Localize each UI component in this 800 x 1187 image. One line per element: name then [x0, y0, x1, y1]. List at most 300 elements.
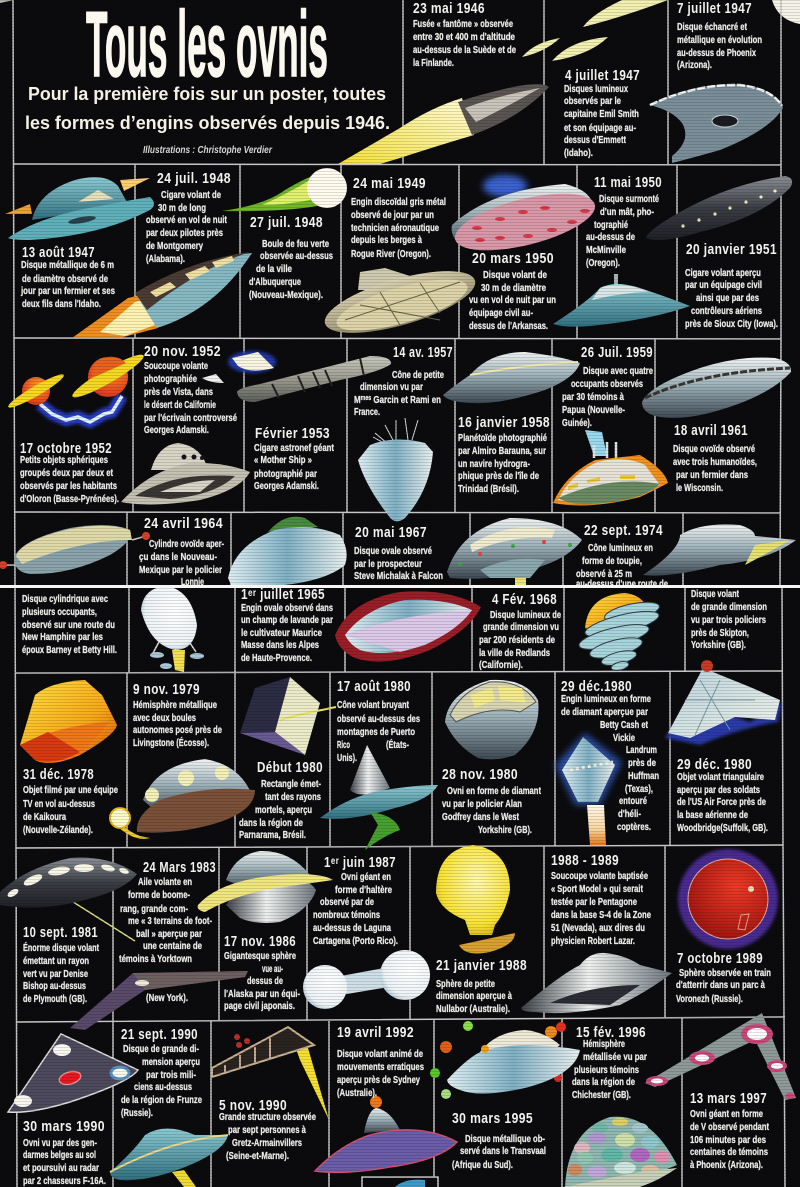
entry: 24 mai 1949: 24 mai 1949 [353, 176, 426, 192]
entry: 21 sept. 1990: Disque de grande di- [123, 1043, 199, 1055]
entry: 19 avril 1992: (Australie). [337, 1087, 377, 1099]
entry: 7 juillet 1947: métallique en évolution [677, 34, 762, 46]
entry: 13 mars 1997: 106 minutes par des [690, 1134, 766, 1146]
icon: disque échancré 1947 [649, 84, 783, 163]
entry: 1er juillet 1965: 1 [241, 587, 250, 603]
icon: disque 1992 [315, 1096, 457, 1172]
entry: 14 av. 1957: dimension vu par [360, 381, 423, 393]
entry: Février 1953 [254, 426, 334, 492]
entry: 18 avril 1961: par un fermier dans [676, 469, 748, 481]
entry: 29 déc.1980 diamant: Landrum [626, 744, 657, 756]
entry: 28 nov. 1980: Ovni en forme de diamant [447, 785, 541, 797]
icon: ovale 1967 [228, 517, 347, 587]
entry: 30 mars 1995: (Afrique du Sud). [452, 1159, 513, 1171]
entry: 26 Juil. 1959: Papua (Nouvelle- [562, 404, 625, 416]
entry: 20 mars 1950: 30 m de diamètre [481, 282, 546, 294]
entry: 20 janvier 1951: par un équipage civil [685, 279, 762, 291]
icon: objets sphériques 1952 [6, 349, 147, 422]
icon: triangle belge 1990 [8, 1034, 138, 1112]
entry: 24 avril 1964 [139, 516, 224, 588]
entry: 26 Juil. 1959: Disque avec quatre [583, 365, 653, 377]
entry: 29 déc.1980 diamant: 29 déc.1980 [561, 679, 632, 695]
entry: 24 juil. 1948 [146, 171, 231, 265]
icon: engin discoïdal 1949 [319, 258, 481, 346]
entry: 9 nov. 1979: Hémisphère métallique [133, 699, 217, 711]
entry: 1er juillet 1965: Engin ovale observé dans [241, 602, 333, 614]
entry: 17 nov. 1986: page civil japonais. [224, 1000, 295, 1012]
entry: 9 nov. 1979: 9 nov. 1979 [133, 682, 200, 698]
entry: 30 mars 1990 [23, 1119, 106, 1187]
entry: 21 sept. 1990: 21 sept. 1990 [121, 1027, 198, 1043]
entry: 7 octobre 1989: d'atterrir dans un parc à [676, 979, 765, 991]
entry: 24 avril 1964: 24 avril 1964 [144, 516, 223, 532]
entry: 27 juil. 1948: de la ville [256, 263, 292, 275]
entry: 1988 - 1989 [551, 853, 651, 947]
entry: 18 avril 1961: Disque ovoïde observé [673, 443, 755, 455]
entry: Début 1980: Rectangle émet- [261, 778, 321, 790]
entry: 13 mars 1997: Ovni géant en forme [690, 1108, 763, 1120]
entry: 20 nov. 1952: par l'écrivain controversé [144, 412, 237, 424]
entry: 24 Mars 1983: (New York). [146, 992, 188, 1004]
entry: 15 fév. 1996: Hémisphère [583, 1038, 625, 1050]
entry: 31 déc. 1978: TV en vol au-dessus [23, 798, 95, 810]
entry: 24 juil. 1948: observé en vol de nuit [146, 214, 227, 226]
entry: 29 déc. 1980 triangle: de l'US Air Force près de [677, 796, 766, 808]
entry: 1er juin 1987: nombreux témoins [313, 909, 380, 921]
entry: 29 déc. 1980 triangle: la base aérienne de [677, 809, 748, 821]
entry: 24 Mars 1983: témoins à Yorktown [119, 953, 192, 965]
entry: 15 fév. 1996 [572, 1025, 647, 1101]
entry: 17 août 1980 [337, 679, 420, 764]
icon: astronef Mother Ship [237, 356, 391, 402]
entry: 10 sept. 1981: Énorme disque volant [23, 941, 99, 954]
entry: 24 juil. 1948: Cigare volant de [161, 189, 221, 201]
entry: 5 nov. 1990: par sept personnes à [228, 1124, 306, 1136]
entry: 18 avril 1961: 18 avril 1961 [674, 423, 748, 439]
entry: 15 fév. 1996: Chichester (GB). [572, 1089, 631, 1101]
entry: 10 sept. 1981: vert vu par Denise [23, 968, 88, 980]
entry: 20 mars 1950: Disque volant de [483, 269, 547, 281]
entry: 17 nov. 1986: 17 nov. 1986 [224, 934, 296, 950]
entry: 10 sept. 1981: Bishop au-dessus [23, 980, 86, 992]
entry: 24 Mars 1983: une centaine de [143, 940, 202, 952]
icon: sphère ampoule 1988 [436, 845, 515, 953]
entry: 29 déc. 1980 triangle: 29 déc. 1980 [677, 757, 752, 773]
icon: Sport Model 1988 [521, 953, 672, 1013]
entry: 20 janvier 1951 [685, 242, 778, 330]
entry: 27 juil. 1948: observée au-dessus [260, 250, 333, 262]
entry: 20 nov. 1952: photographiée [144, 373, 197, 385]
entry: Février 1953: Cigare astronef géant [254, 442, 334, 454]
icon: disque de Frunze 1990 [110, 1128, 228, 1187]
text: disque de Skipton: Yorkshire (GB). [691, 639, 746, 651]
entry: 1988 - 1989: 51 (Nevada), aux dires du [551, 922, 645, 934]
entry: 4 juillet 1947: Disques lumineux [564, 83, 628, 95]
icon: hémisphère métallique 1979 [110, 759, 255, 839]
entry: 24 juil. 1948: de Montgomery [146, 240, 203, 252]
entry: Début 1980: Début 1980 [257, 760, 323, 776]
entry: 1988 - 1989: dans la base S-4 de la Zone [551, 909, 651, 921]
entry: 16 janvier 1958 [458, 415, 550, 495]
icon: disque hublots 1967 [447, 518, 582, 586]
entry: 28 nov. 1980: vu par le policier Alan [442, 798, 522, 810]
text: disque cylindrique Barney et Betty Hill: époux Barney et Betty Hill. [22, 644, 117, 656]
entry: 21 janvier 1988: Nullabor (Australie). [436, 1003, 510, 1015]
entry: 20 janvier 1951: contrôleurs aériens [691, 305, 762, 317]
icon: soucoupe Adamski [121, 443, 250, 505]
entry: 7 juillet 1947: Disque échancré et [677, 21, 747, 33]
entry: 28 nov. 1980: 28 nov. 1980 [442, 767, 518, 783]
entry: 17 nov. 1986: Gigantesque sphère [224, 950, 296, 962]
entry: 31 déc. 1978: de Kaikoura [23, 811, 66, 823]
entry: 20 mars 1950: 20 mars 1950 [472, 251, 554, 267]
entry: 20 nov. 1952 [144, 344, 237, 436]
entry: 29 déc. 1980 triangle [677, 757, 768, 834]
entry: 17 nov. 1986 [224, 934, 300, 1012]
entry: 29 déc. 1980 triangle: aperçu par des soldats [677, 784, 760, 796]
entry: 22 sept. 1974: au-dessus d'une route de [576, 578, 668, 590]
icon: disque en feu 1959 [553, 430, 668, 505]
entry: Début 1980: mortels, aperçu [255, 804, 312, 816]
entry: 7 octobre 1989: Voronezh (Russie). [676, 993, 743, 1005]
entry: 4 Fév. 1968 [479, 592, 561, 671]
entry: 1er juin 1987: forme d'haltère [335, 884, 392, 896]
entry: Février 1953: Février 1953 [255, 426, 330, 442]
text: disque cylindrique Barney et Betty Hill: observé sur une route du [22, 619, 115, 631]
subtitle: Pour la première fois sur un poster, toutes [28, 84, 386, 104]
icon: ovni en V 1997 [645, 1013, 796, 1100]
icon: sphère à anneau 1986 [198, 851, 333, 923]
entry: 19 avril 1992 [337, 1025, 424, 1099]
icon: soucoupe 1974 [643, 524, 796, 576]
entry: 26 Juil. 1959 [562, 345, 653, 429]
entry: 1er juillet 1965: Masse dans les Alpes [241, 639, 319, 651]
entry: 4 juillet 1947: 4 juillet 1947 [565, 68, 640, 84]
entry: 23 mai 1946 [413, 1, 516, 69]
entry: 29 déc. 1980 triangle: Objet volant triangulaire [677, 771, 764, 783]
entry: 27 juil. 1948: d'Albuquerque [249, 276, 301, 288]
entry: 30 mars 1995: servé dans le Transvaal [460, 1145, 546, 1157]
entry: 28 nov. 1980: Godfrey dans le West [442, 811, 519, 823]
entry: 20 mai 1967: par le prospecteur [354, 558, 422, 570]
entry: 20 janvier 1951: ainsi que par des [696, 292, 759, 304]
icon: dôme multicolore 1996 [563, 1117, 677, 1187]
entry: 15 fév. 1996: métallisée vu par [583, 1051, 647, 1063]
entry: 1er juillet 1965: le cultivateur Maurice [241, 627, 322, 639]
icon: disques lumineux 1947 [522, 0, 668, 61]
entry: 4 juillet 1947: capitaine Emil Smith [564, 108, 639, 120]
entry: 22 sept. 1974: forme de toupie, [582, 555, 642, 567]
entry: 17 octobre 1952: Petits objets sphériques [20, 454, 108, 466]
entry: 7 octobre 1989: 7 octobre 1989 [677, 951, 763, 967]
entry: 19 avril 1992: aperçu près de Sydney [337, 1074, 420, 1086]
entry: 14 av. 1957: M [354, 394, 363, 406]
entry: 23 mai 1946: Fusée « fantôme » observée [413, 18, 513, 30]
entry: 29 déc.1980 diamant: coptères. [617, 821, 651, 833]
entry: 30 mars 1995: 30 mars 1995 [452, 1111, 533, 1127]
entry: 16 janvier 1958: phique près de l'île de [458, 470, 539, 482]
entry: 21 sept. 1990: par trois mili- [146, 1069, 196, 1081]
entry: 16 janvier 1958: 16 janvier 1958 [458, 415, 550, 431]
entry: 11 mai 1950: d'un mât, pho- [600, 206, 654, 218]
entry: 13 mars 1997: de V observé pendant [690, 1121, 769, 1133]
entry: 21 sept. 1990: mension aperçu [142, 1056, 200, 1068]
entry: 17 août 1980: 17 août 1980 [337, 679, 411, 695]
entry: 21 janvier 1988: 21 janvier 1988 [436, 958, 527, 974]
entry: 20 janvier 1951: Cigare volant aperçu [685, 267, 761, 279]
entry: 16 janvier 1958: par Almiro Barauna, sur [458, 445, 546, 457]
entry: 4 juillet 1947: observés par le [564, 95, 621, 107]
text: disque cylindrique Barney et Betty Hill: Disque cylindrique avec [22, 593, 108, 605]
entry: 20 nov. 1952: le désert de Californie [144, 399, 216, 411]
icon: cigare volant 1948 [72, 252, 252, 338]
entry: 24 mai 1949: Rogue River (Oregon). [351, 248, 431, 260]
entry: 9 nov. 1979 [133, 682, 222, 749]
icon: diamant lumineux 1980 [555, 733, 622, 845]
entry: 28 nov. 1980 [442, 767, 541, 836]
entry: Début 1980 [239, 760, 323, 841]
entry: 21 sept. 1990 [121, 1027, 202, 1119]
entry: 14 av. 1957: Cône de petite [392, 369, 444, 381]
entry: 5 nov. 1990: (Seine-et-Marne). [226, 1150, 289, 1162]
entry: 1er juin 1987: Ovni géant en [341, 871, 391, 883]
entry: 29 déc.1980 diamant: de diamant aperçue par [561, 706, 648, 718]
entry: 5 nov. 1990: Grande structure observée [219, 1111, 316, 1123]
entry: 13 août 1947: deux fils dans l'Idaho. [22, 298, 101, 310]
entry: 26 Juil. 1959: par 30 témoins à [562, 391, 624, 403]
entry: 17 août 1980: montagnes de Puerto [337, 726, 415, 738]
entry: 7 octobre 1989 [676, 951, 771, 1005]
entry: 13 mars 1997: centaines de témoins [690, 1146, 768, 1158]
entry: 22 sept. 1974: observé à 25 m [576, 568, 632, 580]
entry: 5 nov. 1990: 5 nov. 1990 [219, 1098, 287, 1114]
icon: objet triangulaire 1980 [665, 660, 782, 745]
entry: 17 août 1980: observé au-dessus des [337, 713, 420, 725]
icon: soucoupe 13 août 1947 [5, 177, 154, 240]
entry: 17 octobre 1952: d'Oloron (Basse-Pyrénées). [20, 493, 119, 505]
entry: 30 mars 1990: par 2 chasseurs F-16A. [23, 1175, 106, 1187]
subtitle [25, 84, 390, 133]
entry: 1er juillet 1965: er [248, 588, 256, 599]
entry: 24 mai 1949: observé de jour par un [351, 209, 434, 221]
entry: 1er juin 1987 [313, 855, 398, 947]
icon: disque rose 1950 [450, 175, 600, 262]
entry: 11 mai 1950: 11 mai 1950 [594, 175, 662, 191]
entry: 5 nov. 1990 [219, 1098, 316, 1162]
entry: 4 Fév. 1968: (Californie). [479, 659, 523, 671]
entry: 13 août 1947: Disque métallique de 6 m [21, 259, 114, 271]
entry: 30 mars 1990: et poursuivi au radar [23, 1162, 99, 1174]
entry: 20 mars 1950 [469, 251, 556, 332]
entry: Février 1953: « Mother Ship » [254, 454, 312, 466]
icon: cigare 1951 [646, 176, 792, 240]
entry: 19 avril 1992: Disque volant animé de [337, 1048, 423, 1060]
text: disque de Skipton: Disque volant [691, 588, 739, 600]
entry: 13 août 1947: jour par un fermier et ses [20, 285, 115, 297]
icon: petites soucoupes 1952 [202, 351, 276, 383]
text: disque de Skipton [691, 588, 767, 651]
entry: 29 déc.1980 diamant: d'héli- [618, 808, 641, 820]
entry: 17 août 1980: Rico [337, 739, 350, 751]
icon: capsule orange 1978 [20, 680, 117, 763]
entry: Février 1953: photographié par [254, 468, 317, 480]
entry: 21 janvier 1988: dimension aperçue à [436, 990, 512, 1002]
entry: 17 nov. 1986: l'Alaska par un équi- [224, 988, 300, 1000]
entry: 1er juillet 1965: juillet 1965 [256, 587, 325, 603]
icon: boule de feu verte [222, 168, 347, 211]
entry: 4 juillet 1947: et son équipage au- [564, 122, 636, 134]
icon: grande structure 1990 [212, 1027, 329, 1120]
entry: 23 mai 1946: entre 30 et 400 m d'altitude [413, 31, 515, 43]
entry: 1er juillet 1965: de Haute-Provence. [241, 652, 312, 664]
entry: 17 nov. 1986: vue au- [262, 963, 283, 975]
entry: 26 Juil. 1959: 26 Juil. 1959 [581, 345, 653, 361]
entry: 24 Mars 1983 [119, 860, 216, 1004]
entry: 17 août 1980: Unis). [337, 752, 357, 764]
entry: 20 janvier 1951: 20 janvier 1951 [686, 242, 777, 258]
entry: 13 mars 1997: à Phoenix (Arizona). [690, 1159, 763, 1171]
entry: 13 août 1947 [20, 245, 115, 310]
entry: 19 avril 1992: 19 avril 1992 [337, 1025, 414, 1041]
entry: 20 nov. 1952: Georges Adamski. [144, 424, 209, 436]
entry: 20 mars 1950: dessus de l'Arkansas. [469, 320, 548, 332]
entry: 24 juil. 1948: 30 m de long [158, 202, 206, 214]
entry: 13 mars 1997: 13 mars 1997 [690, 1091, 767, 1107]
entry: 11 mai 1950: tographié [594, 219, 628, 231]
entry: 20 mai 1967: Steve Michalak à Falcon [354, 570, 443, 582]
entry: 30 mars 1990: Ovni vu par des gen- [23, 1137, 97, 1149]
entry: 1988 - 1989: physicien Robert Lazar. [551, 935, 635, 947]
entry: 17 nov. 1986: dessus de [247, 975, 283, 987]
entry: 24 Mars 1983: me « 3 terrains de foot- [128, 915, 212, 927]
entry: 20 mai 1967: Disque ovale observé [354, 545, 432, 557]
entry: 21 sept. 1990: de la région de Frunze [121, 1094, 202, 1106]
entry: 27 juil. 1948: Boule de feu verte [262, 238, 329, 250]
entry: 24 avril 1964: Mexique par le policier [139, 564, 222, 576]
entry: 11 mai 1950 [586, 175, 662, 269]
entry: 24 avril 1964: Cylindre ovoïde aper- [149, 538, 224, 550]
entry: 24 juil. 1948: par deux pilotes près [146, 227, 223, 239]
entry: 17 août 1980: (États- [386, 738, 409, 751]
entry: 11 mai 1950: Disque surmonté [599, 193, 659, 205]
entry: 30 mars 1990: 30 mars 1990 [23, 1119, 105, 1135]
text: disque de Skipton: de grande dimension [691, 601, 767, 613]
entry: 27 juil. 1948: (Nouveau-Mexique). [249, 289, 323, 301]
entry: 10 sept. 1981: émettant un rayon [23, 955, 89, 967]
entry: 4 Fév. 1968: par 200 résidents de [479, 634, 555, 646]
entry: 30 mars 1990: darmes belges au sol [23, 1149, 96, 1161]
entry: 9 nov. 1979: Livingstone (Écosse). [133, 736, 209, 749]
entry: 24 Mars 1983: forme de boome- [128, 889, 190, 901]
entry: 26 Juil. 1959: Guinée). [562, 417, 592, 429]
icon: haltère 1987 [303, 950, 430, 1009]
credit: Illustrations : Christophe Verdier [143, 144, 273, 156]
text: disque cylindrique Barney et Betty Hill: plusieurs occupants, [22, 606, 97, 618]
entry: 10 sept. 1981: 10 sept. 1981 [23, 925, 98, 941]
entry: 24 Mars 1983: rang, grande com- [120, 903, 188, 915]
entry: 17 octobre 1952: observés par les habitants [20, 480, 117, 492]
entry: 21 janvier 1988: Sphère de petite [436, 978, 495, 990]
entry: 18 avril 1961: avec trois humanoïdes, [673, 456, 757, 468]
entry: 13 mars 1997 [690, 1091, 769, 1171]
entry: 31 déc. 1978: Objet filmé par une équipe [23, 784, 118, 796]
icon: sphère rouge 1989 [678, 849, 778, 949]
entry: 21 janvier 1988 [436, 958, 527, 1015]
entry: 24 avril 1964: çu dans le Nouveau- [139, 551, 217, 563]
entry: 22 sept. 1974 [576, 523, 668, 590]
entry: 29 déc.1980 diamant: Engin lumineux en forme [561, 693, 651, 705]
entry: 29 déc.1980 diamant: Vickie [613, 732, 635, 744]
entry: 4 Fév. 1968: Disque lumineux de [490, 609, 561, 621]
entry: 4 juillet 1947: (Idaho). [564, 147, 593, 159]
entry: 11 mai 1950: au-dessus de [586, 231, 635, 243]
entry: 1988 - 1989: « Sport Model » qui serait [551, 883, 643, 895]
entry: 20 mars 1950: équipage civil au- [469, 307, 533, 319]
entry: 11 mai 1950: McMinville [586, 244, 626, 256]
entry: 17 octobre 1952 [20, 441, 119, 505]
entry: 1988 - 1989: Soucoupe volante baptisée [551, 870, 648, 882]
entry: 4 Fév. 1968: 4 Fév. 1968 [492, 592, 557, 608]
entry: 23 mai 1946: la Finlande. [413, 57, 454, 69]
text: disque cylindrique Barney et Betty Hill [22, 593, 117, 656]
entry: 20 mars 1950: vu en vol de nuit par un [469, 294, 556, 306]
entry: 14 av. 1957: 14 av. 1957 [393, 345, 453, 361]
entry: 24 juil. 1948: 24 juil. 1948 [157, 171, 231, 187]
icon: œuf à réacteur 1965 [141, 586, 204, 672]
entry: 18 avril 1961 [673, 423, 757, 494]
entry: 22 sept. 1974: 22 sept. 1974 [584, 523, 663, 539]
entry: 1er juillet 1965 [241, 587, 333, 664]
entry: Début 1980: Parnarama, Brésil. [239, 829, 306, 841]
entry: 17 août 1980: Cône volant bruyant [337, 699, 409, 711]
entry: 15 fév. 1996: plusieurs témoins [574, 1064, 639, 1076]
entry: 13 août 1947: de diamètre observé de [22, 273, 108, 285]
box: cartouche bas de page [362, 1177, 438, 1187]
entry: 22 sept. 1974: Cône lumineux en [588, 542, 653, 554]
entry: 17 octobre 1952: groupés deux par deux et [20, 467, 113, 479]
entry: 28 nov. 1980: Yorkshire (GB). [478, 824, 532, 836]
entry: 14 av. 1957: Garcin et Rami en [371, 394, 441, 406]
entry: 1er juin 1987: au-dessus de Laguna [313, 922, 391, 934]
entry: 1er juin 1987: observé par de [320, 896, 374, 908]
icon: aile boomerang 1983 [70, 971, 248, 1030]
entry: 1er juin 1987: 1 [324, 855, 333, 871]
entry: Début 1980: dans la région de [239, 817, 303, 829]
icon: rectangle émettant des rayons 1980 [240, 677, 336, 755]
entry: 24 mai 1949: depuis les berges à [351, 234, 422, 246]
entry: 1er juillet 1965: un champ de lavande par [241, 614, 333, 626]
entry: 16 janvier 1958: Planétoïde photographié [458, 432, 547, 444]
entry: 1988 - 1989: 1988 - 1989 [551, 853, 619, 869]
entry: 31 déc. 1978: 31 déc. 1978 [23, 767, 94, 783]
entry: 26 Juil. 1959: occupants observés [571, 378, 643, 390]
entry: 30 mars 1995 [452, 1111, 546, 1171]
entry: 24 mai 1949 [351, 176, 446, 260]
entry: 31 déc. 1978: (Nouvelle-Zélande). [23, 824, 93, 836]
entry: 29 déc.1980 diamant: entouré [619, 795, 647, 807]
icon: toupie 1968 [577, 593, 661, 672]
icon: soucoupe 16 janvier 1958 [443, 352, 580, 403]
entry: 23 mai 1946: au-dessus de la Suède et de [413, 44, 516, 56]
entry: 24 mai 1949: technicien aéronautique [351, 222, 439, 234]
entry: 21 sept. 1990: ciens au-dessus [134, 1081, 192, 1093]
entry: 1988 - 1989: testée par le Pentagone [551, 896, 637, 908]
entry: 7 juillet 1947: 7 juillet 1947 [677, 1, 752, 17]
entry: 17 octobre 1952: 17 octobre 1952 [20, 441, 112, 457]
entry: 20 nov. 1952: 20 nov. 1952 [144, 344, 221, 360]
entry: 10 sept. 1981: de Plymouth (GB). [23, 993, 87, 1005]
entry: 15 fév. 1996: dans la région de [572, 1076, 635, 1088]
